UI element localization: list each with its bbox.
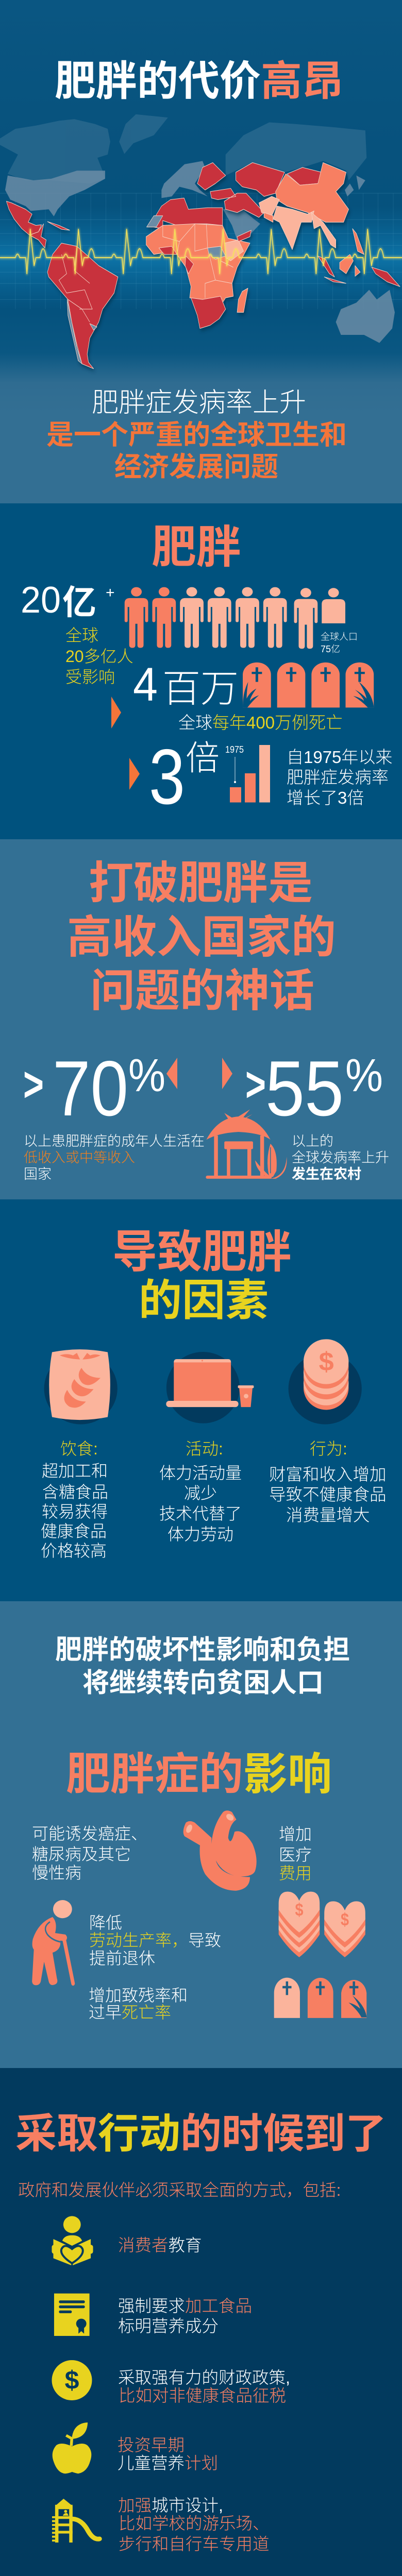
heading: burden shift bbox=[55, 1628, 350, 1700]
arrow bbox=[129, 758, 140, 790]
icon: dollar coin: $ bbox=[65, 2366, 79, 2395]
text: world population bbox=[321, 632, 358, 654]
heading: myth: 问题的神话 bbox=[90, 955, 314, 1020]
icon: stacks of heart coins bbox=[279, 1892, 365, 1957]
bar chart: growth since 1975: 1975 bbox=[225, 744, 244, 755]
icon: elderly person with cane bbox=[32, 1900, 73, 1985]
text: chronic disease bbox=[32, 1824, 147, 1882]
icon: reader with heart book bbox=[52, 2216, 93, 2265]
stat: over 55 percent: > bbox=[245, 1057, 266, 1112]
arrow bbox=[111, 697, 121, 728]
column: diet: 饮食: bbox=[60, 1439, 98, 1458]
text: world population: 75亿 bbox=[321, 644, 340, 654]
text: medical costs bbox=[279, 1825, 312, 1883]
column: behaviour: 导致不健康食品 bbox=[269, 1485, 387, 1504]
hero subtitle: 是一个严重的全球卫生和 bbox=[46, 413, 347, 452]
icon: dollar coin bbox=[52, 2360, 92, 2400]
panel: myth bbox=[0, 839, 402, 1199]
column: activity: 减少 bbox=[184, 1484, 217, 1502]
text: reduced productivity bbox=[89, 1913, 221, 1968]
stat: 3 times bbox=[149, 731, 220, 821]
text: tripled since 1975: 增长了3倍 bbox=[287, 788, 364, 807]
heading: burden shift: 肥胖的破坏性影响和负担 bbox=[55, 1628, 350, 1667]
world map with heartbeat line bbox=[0, 114, 402, 369]
text: over 70 percent low income: 国家 bbox=[24, 1166, 52, 1182]
text: over 70 percent low income bbox=[24, 1133, 205, 1182]
stat: over 70 percent: > bbox=[23, 1057, 44, 1112]
heading: causes bbox=[112, 1216, 292, 1328]
stat: 3 times: 倍 bbox=[186, 731, 220, 780]
text: over 2 billion affected: 受影响 bbox=[65, 668, 115, 686]
text: chronic disease: 糖尿病及其它 bbox=[32, 1845, 131, 1863]
heading: causes: 的因素 bbox=[139, 1266, 269, 1328]
column: activity bbox=[159, 1439, 242, 1544]
hero subtitle: 肥胖症发病率上升 bbox=[92, 381, 306, 419]
text: medical costs: 医疗 bbox=[279, 1845, 312, 1864]
panel: impact bbox=[0, 1601, 402, 2068]
text: early childhood nutrition bbox=[118, 2436, 218, 2472]
bar chart: growth since 1975 bbox=[225, 744, 270, 803]
column: diet: 较易获得 bbox=[42, 1502, 108, 1521]
text: fiscal policy bbox=[118, 2368, 290, 2405]
column: activity: 体力劳动 bbox=[167, 1525, 233, 1544]
text: reduced productivity: 提前退休 bbox=[89, 1949, 155, 1968]
column: diet: 健康食品 bbox=[41, 1522, 107, 1540]
text: over 2 billion affected: 20多亿人 bbox=[65, 647, 133, 666]
icon: stacks of heart coins: $ bbox=[341, 1909, 349, 1929]
text: mandate labelling: 强制要求加工食品 bbox=[118, 2297, 252, 2315]
icon: heart organ bbox=[183, 1810, 257, 1891]
tombstones bbox=[243, 663, 374, 707]
text: urban design bbox=[118, 2496, 270, 2553]
icon: stacks of heart coins: $ bbox=[295, 1900, 304, 1920]
text: consumer education: 消费者教育 bbox=[118, 2236, 202, 2255]
text: over 55 percent rural bbox=[292, 1133, 389, 1183]
text: over 70 percent low income: 以上患肥胖症的成年人生活在 bbox=[24, 1133, 205, 1149]
panel: causes bbox=[0, 1199, 402, 1601]
icon: laptop and cup bbox=[166, 1352, 254, 1423]
text: over 2 billion affected: 全球 bbox=[65, 626, 98, 645]
arrow bbox=[166, 1058, 177, 1089]
stat: over 55 percent: % bbox=[345, 1050, 383, 1101]
heading: myth: 高收入国家的 bbox=[67, 901, 336, 966]
text: reduced productivity: 劳动生产率，导致 bbox=[89, 1931, 221, 1950]
icon: coins: $ bbox=[319, 1347, 334, 1376]
heartbeat line bbox=[0, 229, 402, 274]
panel: obesity facts bbox=[0, 503, 402, 839]
stat: over 70 percent: 70 bbox=[53, 1045, 128, 1132]
stat: 2 billion: + bbox=[106, 584, 115, 601]
column: activity: 体力活动量 bbox=[159, 1464, 242, 1482]
text: mandate labelling bbox=[118, 2297, 252, 2335]
text: over 2 billion affected bbox=[65, 626, 133, 686]
text: disability and mortality bbox=[89, 1986, 188, 2022]
column: diet bbox=[41, 1439, 108, 1560]
column: behaviour bbox=[269, 1439, 387, 1524]
icon: coins bbox=[289, 1339, 362, 1425]
text: fiscal policy: 采取强有力的财政政策, bbox=[118, 2368, 290, 2387]
column: activity: 活动: bbox=[186, 1439, 223, 1458]
column: behaviour: 行为: bbox=[310, 1439, 347, 1458]
heading: time to act: 采取行动的时候到了 bbox=[15, 2100, 387, 2160]
text: tripled since 1975: 自1975年以来 bbox=[287, 748, 392, 767]
stat: 2 billion: 20 bbox=[21, 580, 61, 621]
text: early childhood nutrition: 投资早期 bbox=[118, 2436, 185, 2454]
icon: snack bag bbox=[44, 1349, 118, 1425]
arrow bbox=[222, 1058, 232, 1089]
icon: playground slide bbox=[52, 2499, 99, 2543]
column: diet: 含糖食品 bbox=[42, 1483, 108, 1501]
text: disability and mortality: 过早死亡率 bbox=[89, 2003, 171, 2022]
text: over 55 percent rural: 全球发病率上升 bbox=[292, 1150, 389, 1165]
stat: 2 billion bbox=[21, 575, 115, 624]
text: urban design: 步行和自行车专用道 bbox=[119, 2535, 270, 2553]
stat: 2 billion: 亿 bbox=[62, 575, 96, 624]
heading: myth bbox=[67, 847, 336, 1020]
hero subtitle bbox=[46, 381, 347, 484]
text: tripled since 1975 bbox=[287, 748, 392, 807]
text: chronic disease: 慢性病 bbox=[32, 1863, 81, 1882]
heading: causes: 导致肥胖 bbox=[112, 1216, 292, 1281]
column: diet: 超加工和 bbox=[42, 1462, 108, 1480]
text: over 55 percent rural: 以上的 bbox=[292, 1133, 333, 1149]
icon: tombstones bbox=[274, 1978, 366, 2018]
text: chronic disease: 可能诱发癌症、 bbox=[32, 1824, 147, 1843]
text: 4 million deaths: 全球每年400万例死亡 bbox=[178, 713, 343, 732]
text: tripled since 1975: 肥胖症发病率 bbox=[287, 768, 389, 787]
text: medical costs: 费用 bbox=[279, 1864, 312, 1883]
panel: call to action bbox=[0, 2068, 402, 2576]
panel: hero bbox=[0, 0, 402, 504]
text: early childhood nutrition: 儿童营养计划 bbox=[118, 2454, 218, 2472]
stat: 4 million: 4 bbox=[133, 658, 158, 711]
heading: effects of obesity: 肥胖症的影响 bbox=[66, 1738, 332, 1802]
text: fiscal policy: 比如对非健康食品征税 bbox=[119, 2386, 286, 2405]
stat: 3 times: 3 bbox=[149, 733, 185, 821]
heading: myth: 打破肥胖是 bbox=[89, 847, 313, 912]
stat: over 55 percent bbox=[245, 1045, 383, 1132]
text: urban design: 比如学校的游乐场、 bbox=[119, 2514, 270, 2533]
people pictogram bbox=[125, 587, 345, 649]
icon: rural hut bbox=[206, 1109, 287, 1179]
title: 肥胖的代价高昂 bbox=[55, 48, 343, 108]
column: activity: 技术代替了 bbox=[159, 1504, 242, 1523]
heading: burden shift: 将继续转向贫困人口 bbox=[82, 1661, 324, 1700]
text: urban design: 加强城市设计, bbox=[118, 2496, 223, 2515]
icon: certificate label bbox=[54, 2294, 90, 2336]
text: world population: 全球人口 bbox=[321, 632, 358, 642]
highlighted countries bbox=[6, 163, 400, 369]
text: reduced productivity: 降低 bbox=[89, 1913, 122, 1932]
stat: over 70 percent: % bbox=[128, 1050, 165, 1101]
column: diet: 价格较高 bbox=[41, 1541, 107, 1560]
text: over 55 percent rural: 发生在农村 bbox=[292, 1163, 361, 1183]
stat: over 55 percent: 55 bbox=[265, 1045, 344, 1132]
text: intro: 政府和发展伙伴必须采取全面的方式，包括: bbox=[18, 2181, 341, 2199]
text: over 70 percent low income: 低收入或中等收入 bbox=[24, 1150, 135, 1165]
heading: obesity: 肥胖 bbox=[152, 511, 241, 576]
hero subtitle: 经济发展问题 bbox=[114, 445, 278, 484]
stat: over 70 percent bbox=[23, 1045, 165, 1132]
column: behaviour: 财富和收入增加 bbox=[269, 1465, 387, 1484]
column: behaviour: 消费量增大 bbox=[286, 1506, 370, 1524]
stat: 4 million: 百万 bbox=[162, 658, 239, 713]
text: medical costs: 增加 bbox=[279, 1825, 312, 1843]
text: mandate labelling: 标明营养成分 bbox=[118, 2317, 219, 2335]
text: disability and mortality: 增加致残率和 bbox=[89, 1986, 188, 2005]
icon: apple bbox=[53, 2422, 91, 2473]
